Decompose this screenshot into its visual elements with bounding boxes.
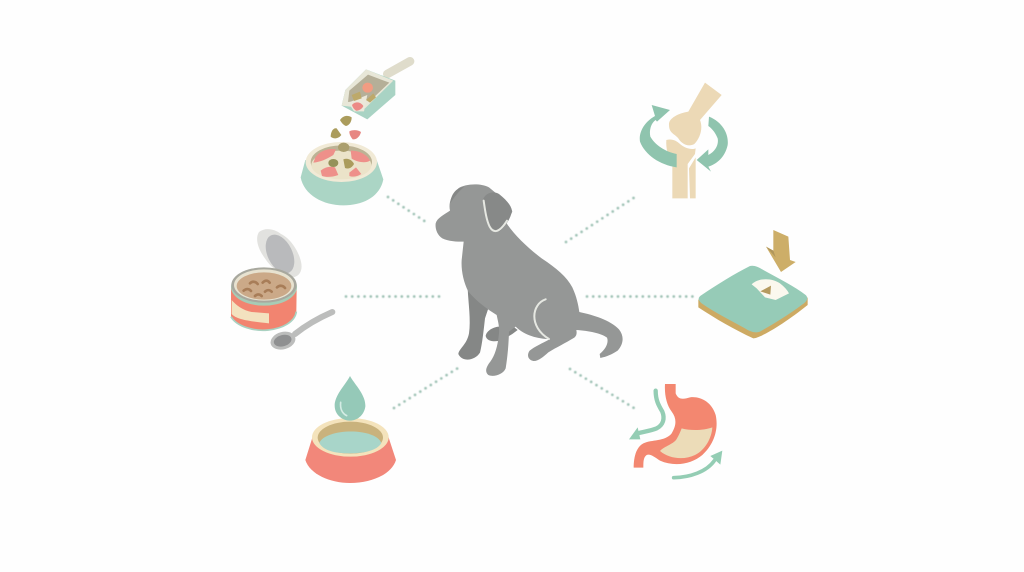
tibia (666, 139, 696, 198)
water drop (335, 376, 365, 421)
lower motion arrow (674, 461, 714, 478)
far front leg (458, 288, 488, 360)
scale top (699, 266, 807, 332)
scoop handle (387, 61, 410, 74)
can label (232, 300, 269, 323)
spoon (295, 312, 332, 334)
bowl rim (312, 418, 389, 457)
stomach contents (660, 427, 712, 458)
left motion arrow (638, 391, 664, 433)
bowl body (301, 160, 383, 205)
icon: open can with spoon (231, 229, 332, 352)
front rotation arrow (640, 105, 677, 167)
scoop contents (362, 83, 373, 93)
down arrow (766, 230, 796, 272)
scale dial (752, 279, 789, 300)
scale base (698, 297, 808, 338)
can body (231, 287, 297, 330)
far paw (486, 324, 518, 341)
dog body (436, 184, 623, 376)
bowl body (305, 437, 396, 483)
icon: dog silhouette (436, 184, 623, 376)
water (319, 431, 381, 453)
bowl food (313, 149, 336, 163)
can food (244, 281, 285, 296)
stomach (634, 384, 717, 468)
bowl rim (306, 142, 377, 182)
icon: water bowl with drop (305, 376, 396, 483)
can rim (231, 268, 297, 306)
icon: joint with rotation arrows (640, 83, 728, 198)
dotted connectors (346, 197, 696, 408)
femur (669, 83, 722, 145)
ear highlight (484, 201, 507, 231)
ear (483, 192, 512, 232)
dark brow (450, 187, 464, 203)
can lid (257, 229, 302, 278)
scoop body (342, 69, 395, 119)
icon: stomach with motion arrows (629, 384, 722, 478)
haunch highlight (534, 299, 549, 339)
scale needle (760, 286, 771, 295)
back rotation arrow (697, 117, 728, 172)
icon: scoop pouring kibble into bowl (301, 61, 410, 205)
icon: weighing scale with down arrow (698, 230, 808, 338)
falling kibble (340, 116, 352, 126)
